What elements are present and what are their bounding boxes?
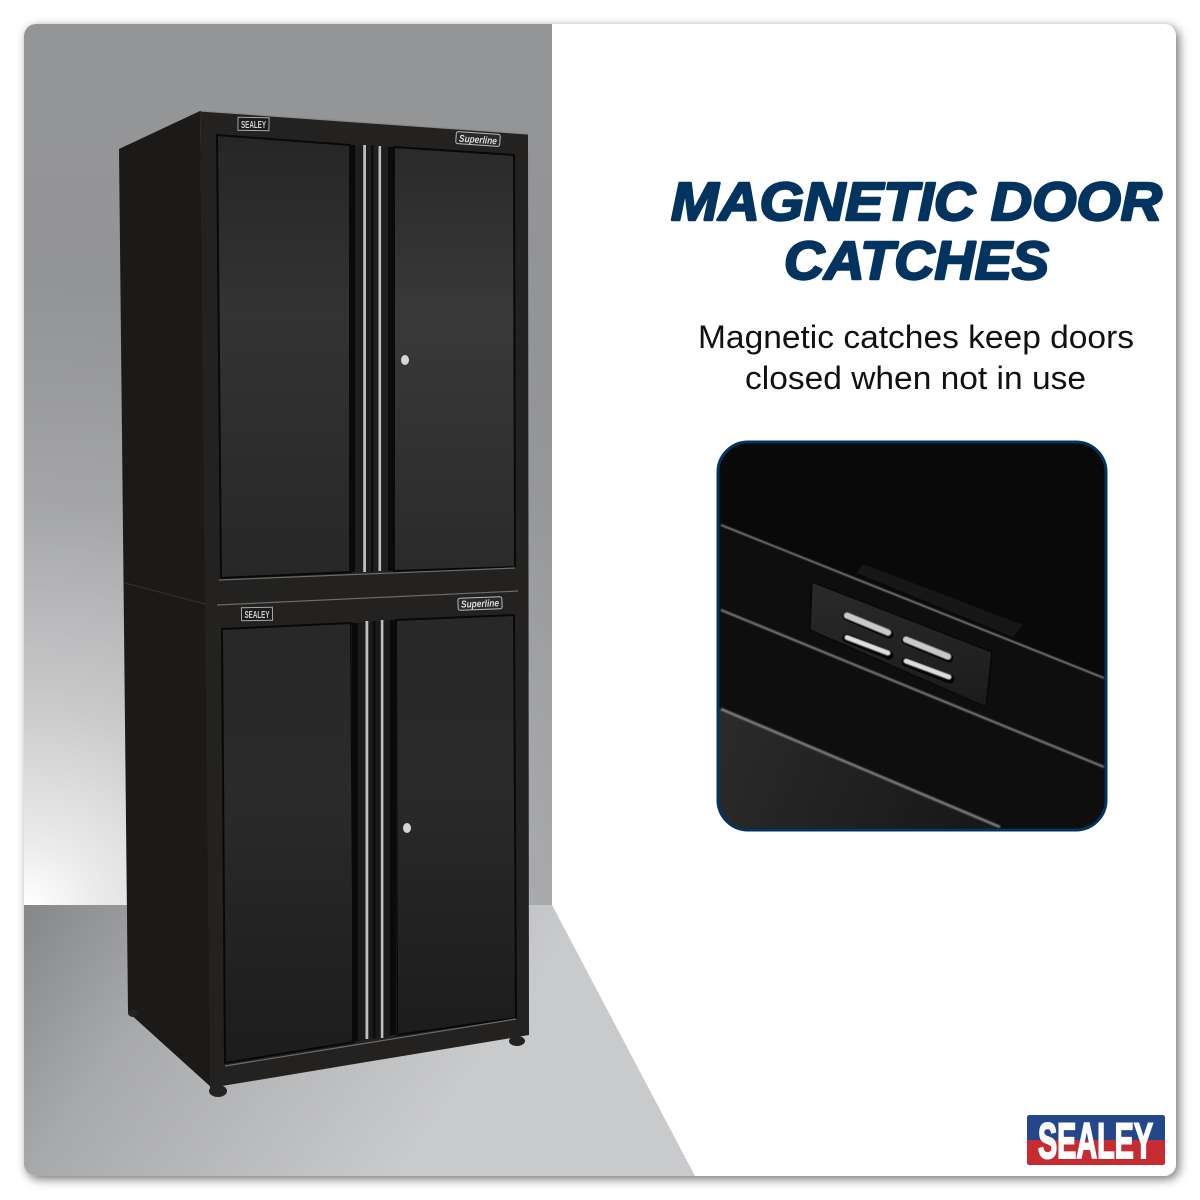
- door panel surface: [718, 708, 1003, 830]
- title line 1: MAGNETIC DOOR: [671, 172, 1162, 232]
- lower lock: [403, 823, 411, 833]
- upper right door: [394, 147, 515, 571]
- lower left door: [222, 623, 354, 1063]
- frame highlight lines: [125, 111, 528, 1066]
- upper left door: [217, 135, 351, 578]
- cabinet side panel: [119, 111, 212, 1088]
- panel: magnetic catch photo: [716, 440, 1108, 832]
- magnet contacts: [847, 616, 950, 679]
- cabinet: [119, 111, 529, 1097]
- upper centre channel: [350, 145, 394, 572]
- floor: [24, 905, 695, 1176]
- cabinet front frame: [200, 111, 529, 1088]
- photo border: [718, 442, 1106, 830]
- lower right door: [396, 615, 516, 1035]
- wall background: [24, 24, 552, 905]
- title: [671, 172, 1162, 291]
- cabinet feet: [128, 1009, 525, 1097]
- upper lock: [401, 355, 409, 365]
- badge: upper range logo: Superline: [459, 134, 498, 147]
- description text: [698, 319, 1134, 396]
- badge: lower SEALEY: [241, 607, 273, 621]
- lower centre channel: [351, 620, 397, 1042]
- magnet plate: [810, 582, 992, 707]
- frame band: [718, 524, 1106, 1000]
- badge: upper SEALEY: SEALEY: [241, 120, 266, 131]
- rear rubber tab: [857, 564, 1023, 637]
- title line 2: CATCHES: [784, 231, 1049, 291]
- badge: upper SEALEY: [238, 117, 269, 131]
- door handles: [349, 145, 396, 1041]
- description line 1: Magnetic catches keep doors: [698, 319, 1134, 355]
- badge: lower range logo: Superline: [461, 598, 500, 611]
- badge: lower SEALEY: SEALEY: [244, 610, 270, 621]
- description line 2: closed when not in use: [745, 360, 1086, 396]
- photo edge lines: [721, 525, 1104, 827]
- panel: product scene: [24, 24, 695, 1176]
